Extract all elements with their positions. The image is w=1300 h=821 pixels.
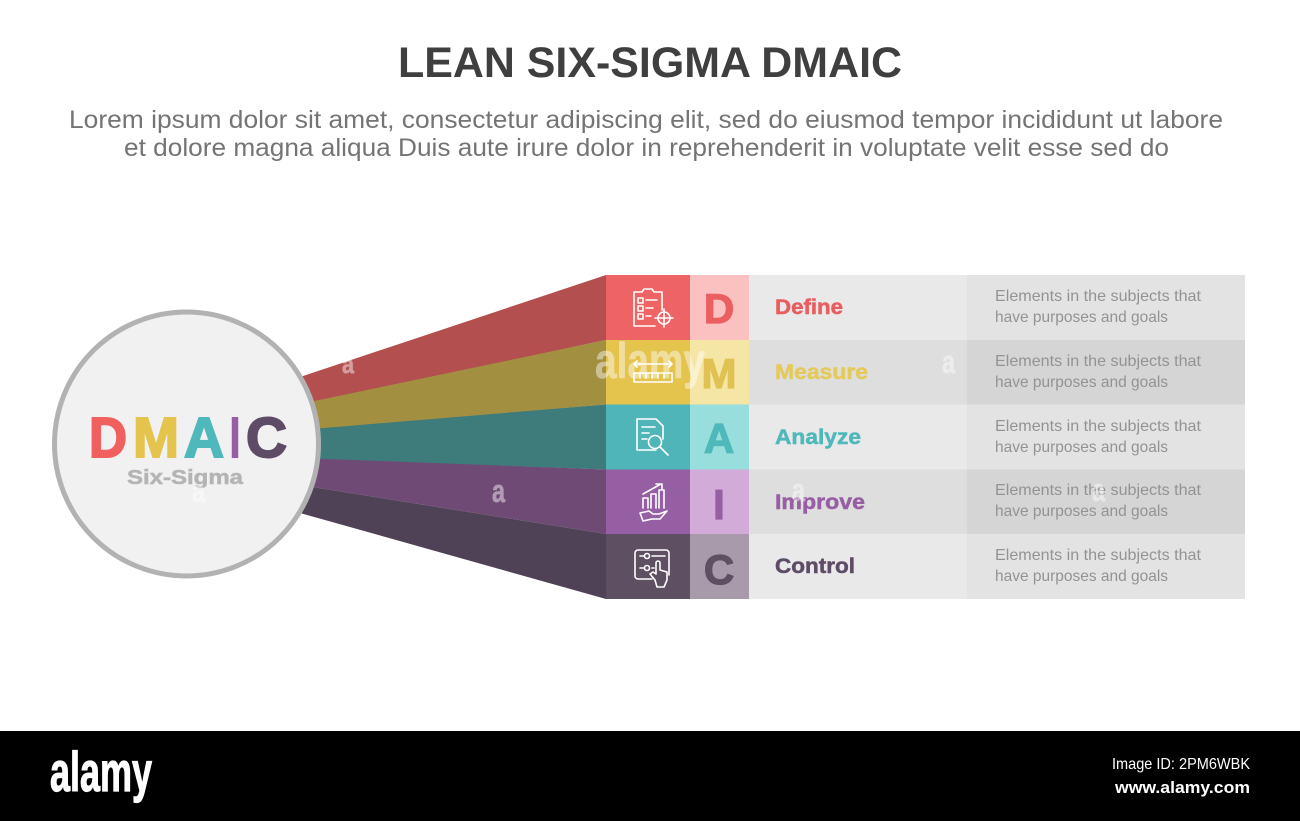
image id: Image ID: 2PM6WBK <box>1112 756 1250 773</box>
row: Measure: have purposes and goals <box>995 374 1168 391</box>
row: Define: Define <box>775 296 843 319</box>
watermarks: a <box>942 344 955 380</box>
row: Measure: M <box>702 350 736 397</box>
subtitle text block: et dolore magna aliqua Duis aute irure dolor in reprehenderit in voluptate velit esse sed do <box>124 134 1169 162</box>
central circle <box>54 312 318 576</box>
watermarks: a <box>342 349 354 379</box>
row: Measure: Elements in the subjects that <box>995 353 1202 370</box>
row: Define: Elements in the subjects that <box>995 288 1202 305</box>
icon: touch control panel <box>635 550 669 587</box>
row: Analyze <box>606 404 1245 470</box>
DMAIC wordmark <box>89 406 287 470</box>
row: Control: C <box>704 546 734 593</box>
DMAIC wordmark: M <box>133 406 179 470</box>
fan of perspective bands <box>300 275 606 599</box>
row: Control: have purposes and goals <box>995 568 1168 585</box>
row: Control: Control <box>775 555 855 578</box>
title: LEAN SIX-SIGMA DMAIC <box>398 39 902 87</box>
subtitle text block: Lorem ipsum dolor sit amet, consectetur adipiscing elit, sed do eiusmod tempor incididunt ut labore <box>69 106 1223 134</box>
row: Analyze: have purposes and goals <box>995 439 1168 456</box>
row: Analyze: Elements in the subjects that <box>995 418 1202 435</box>
DMAIC wordmark: A <box>184 406 224 470</box>
row: Improve: have purposes and goals <box>995 503 1168 520</box>
watermarks: a <box>492 473 505 509</box>
watermarks: alamy <box>595 333 705 389</box>
row: Measure <box>606 340 1245 404</box>
row: Control <box>606 534 1245 599</box>
row: Analyze: Analyze <box>775 426 861 449</box>
watermarks <box>192 333 1105 509</box>
icon: clipboard with target <box>634 289 673 327</box>
DMAIC wordmark: I <box>230 406 240 470</box>
row: Define <box>606 275 1245 340</box>
DMAIC wordmark: D <box>89 406 127 470</box>
row: Define: D <box>704 285 734 332</box>
footer logo: alamy <box>50 740 152 803</box>
row: Measure: Measure <box>775 361 868 384</box>
icon: document with magnifier <box>637 419 668 455</box>
site url: www.alamy.com <box>1114 778 1250 797</box>
subtitle text block <box>69 106 1223 162</box>
footer band <box>0 731 1300 821</box>
row: Improve: I <box>713 481 725 528</box>
row: Improve: Elements in the subjects that <box>995 482 1202 499</box>
watermarks: a <box>792 472 805 508</box>
row: Analyze: A <box>704 415 734 462</box>
icon: ruler <box>634 361 672 382</box>
row: Define: have purposes and goals <box>995 309 1168 326</box>
row: Improve <box>606 470 1245 534</box>
DMAIC wordmark: C <box>246 406 287 470</box>
row: Control: Elements in the subjects that <box>995 547 1202 564</box>
watermarks: a <box>1092 472 1105 508</box>
row: Improve: Improve <box>775 491 865 514</box>
watermarks: a <box>192 473 205 509</box>
Six-Sigma label: Six-Sigma <box>127 467 244 489</box>
icon: growth chart on hand <box>640 484 667 521</box>
